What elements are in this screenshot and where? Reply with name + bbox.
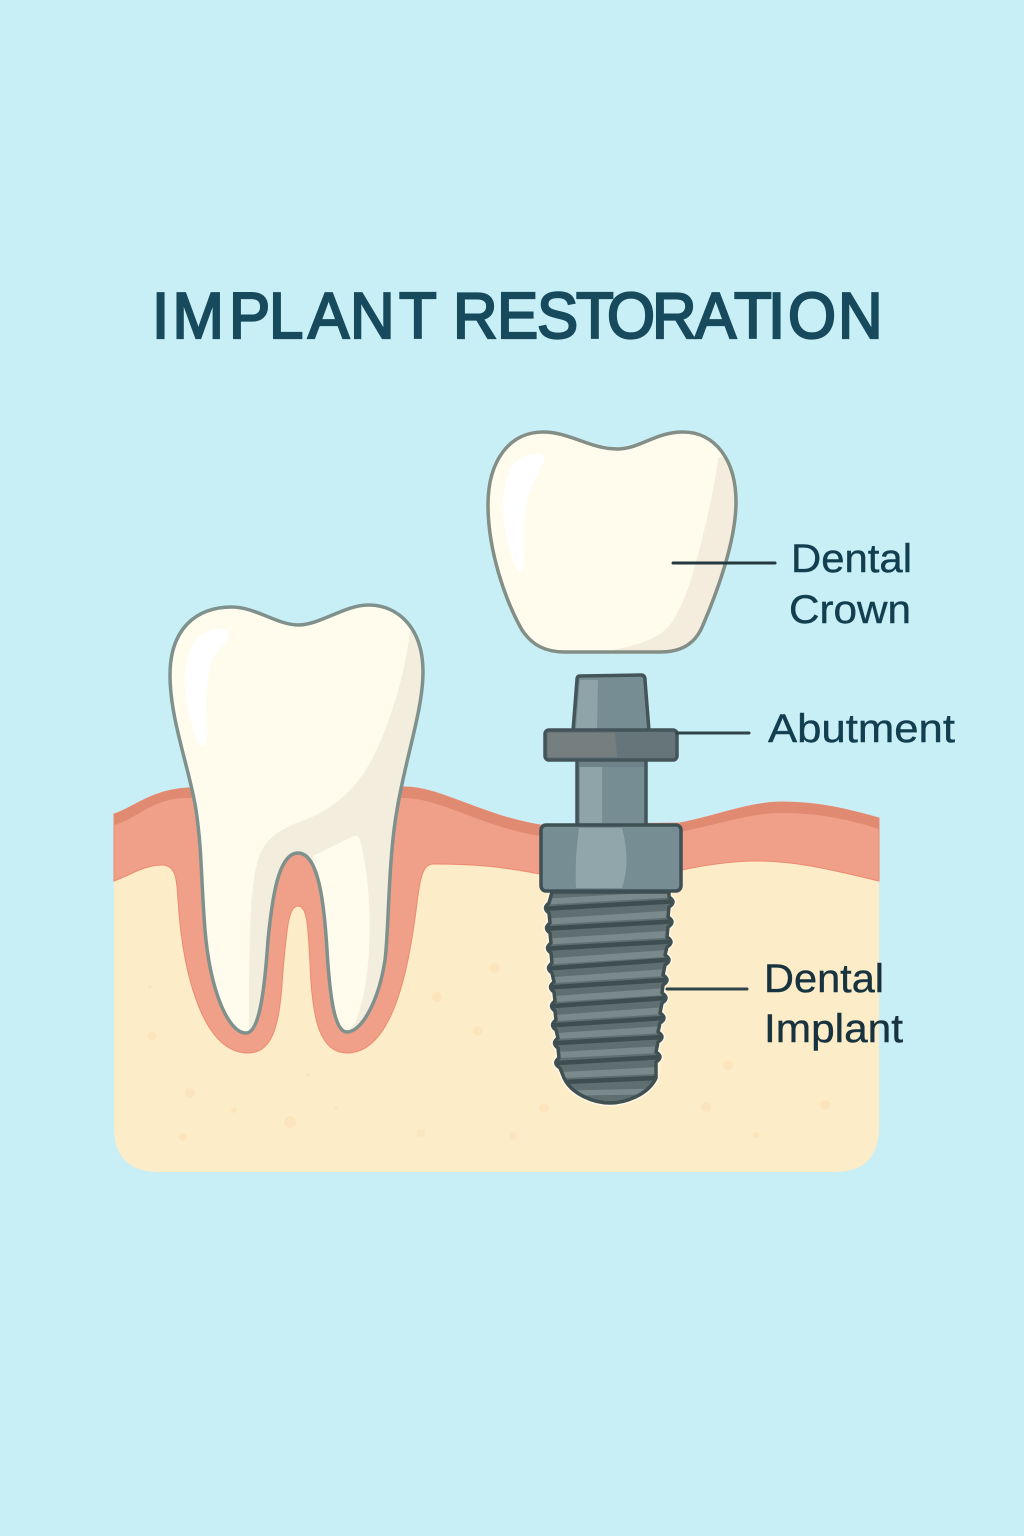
label: dental implant: Dental [764,957,884,1001]
natural tooth [170,605,430,1040]
callout: dental implant [667,957,903,1051]
bone [114,850,879,1172]
implant assembly [540,675,681,1105]
label: dental crown: Crown [789,588,911,632]
implant screw [540,890,680,1105]
label: abutment: Abutment [768,707,955,751]
leader line: implant [667,988,747,990]
abutment cone [573,675,649,731]
label: dental crown: Dental [791,537,912,581]
callout: dental crown [673,537,912,632]
abutment [545,675,677,826]
leader line: crown [673,562,775,564]
label: dental crown [789,537,912,632]
infographic: implant restoration [114,291,955,1172]
leader line: abutment [677,732,749,734]
dental crown [488,432,745,660]
panel: jaw cross-section [114,787,879,1172]
label: dental implant [764,957,903,1051]
abutment flange [545,730,677,760]
label: dental implant: Implant [764,1007,903,1051]
implant collar [541,825,681,891]
gum tissue [114,787,879,1053]
abutment neck [577,758,646,826]
title: IMPLANT RESTORATION [152,281,883,352]
